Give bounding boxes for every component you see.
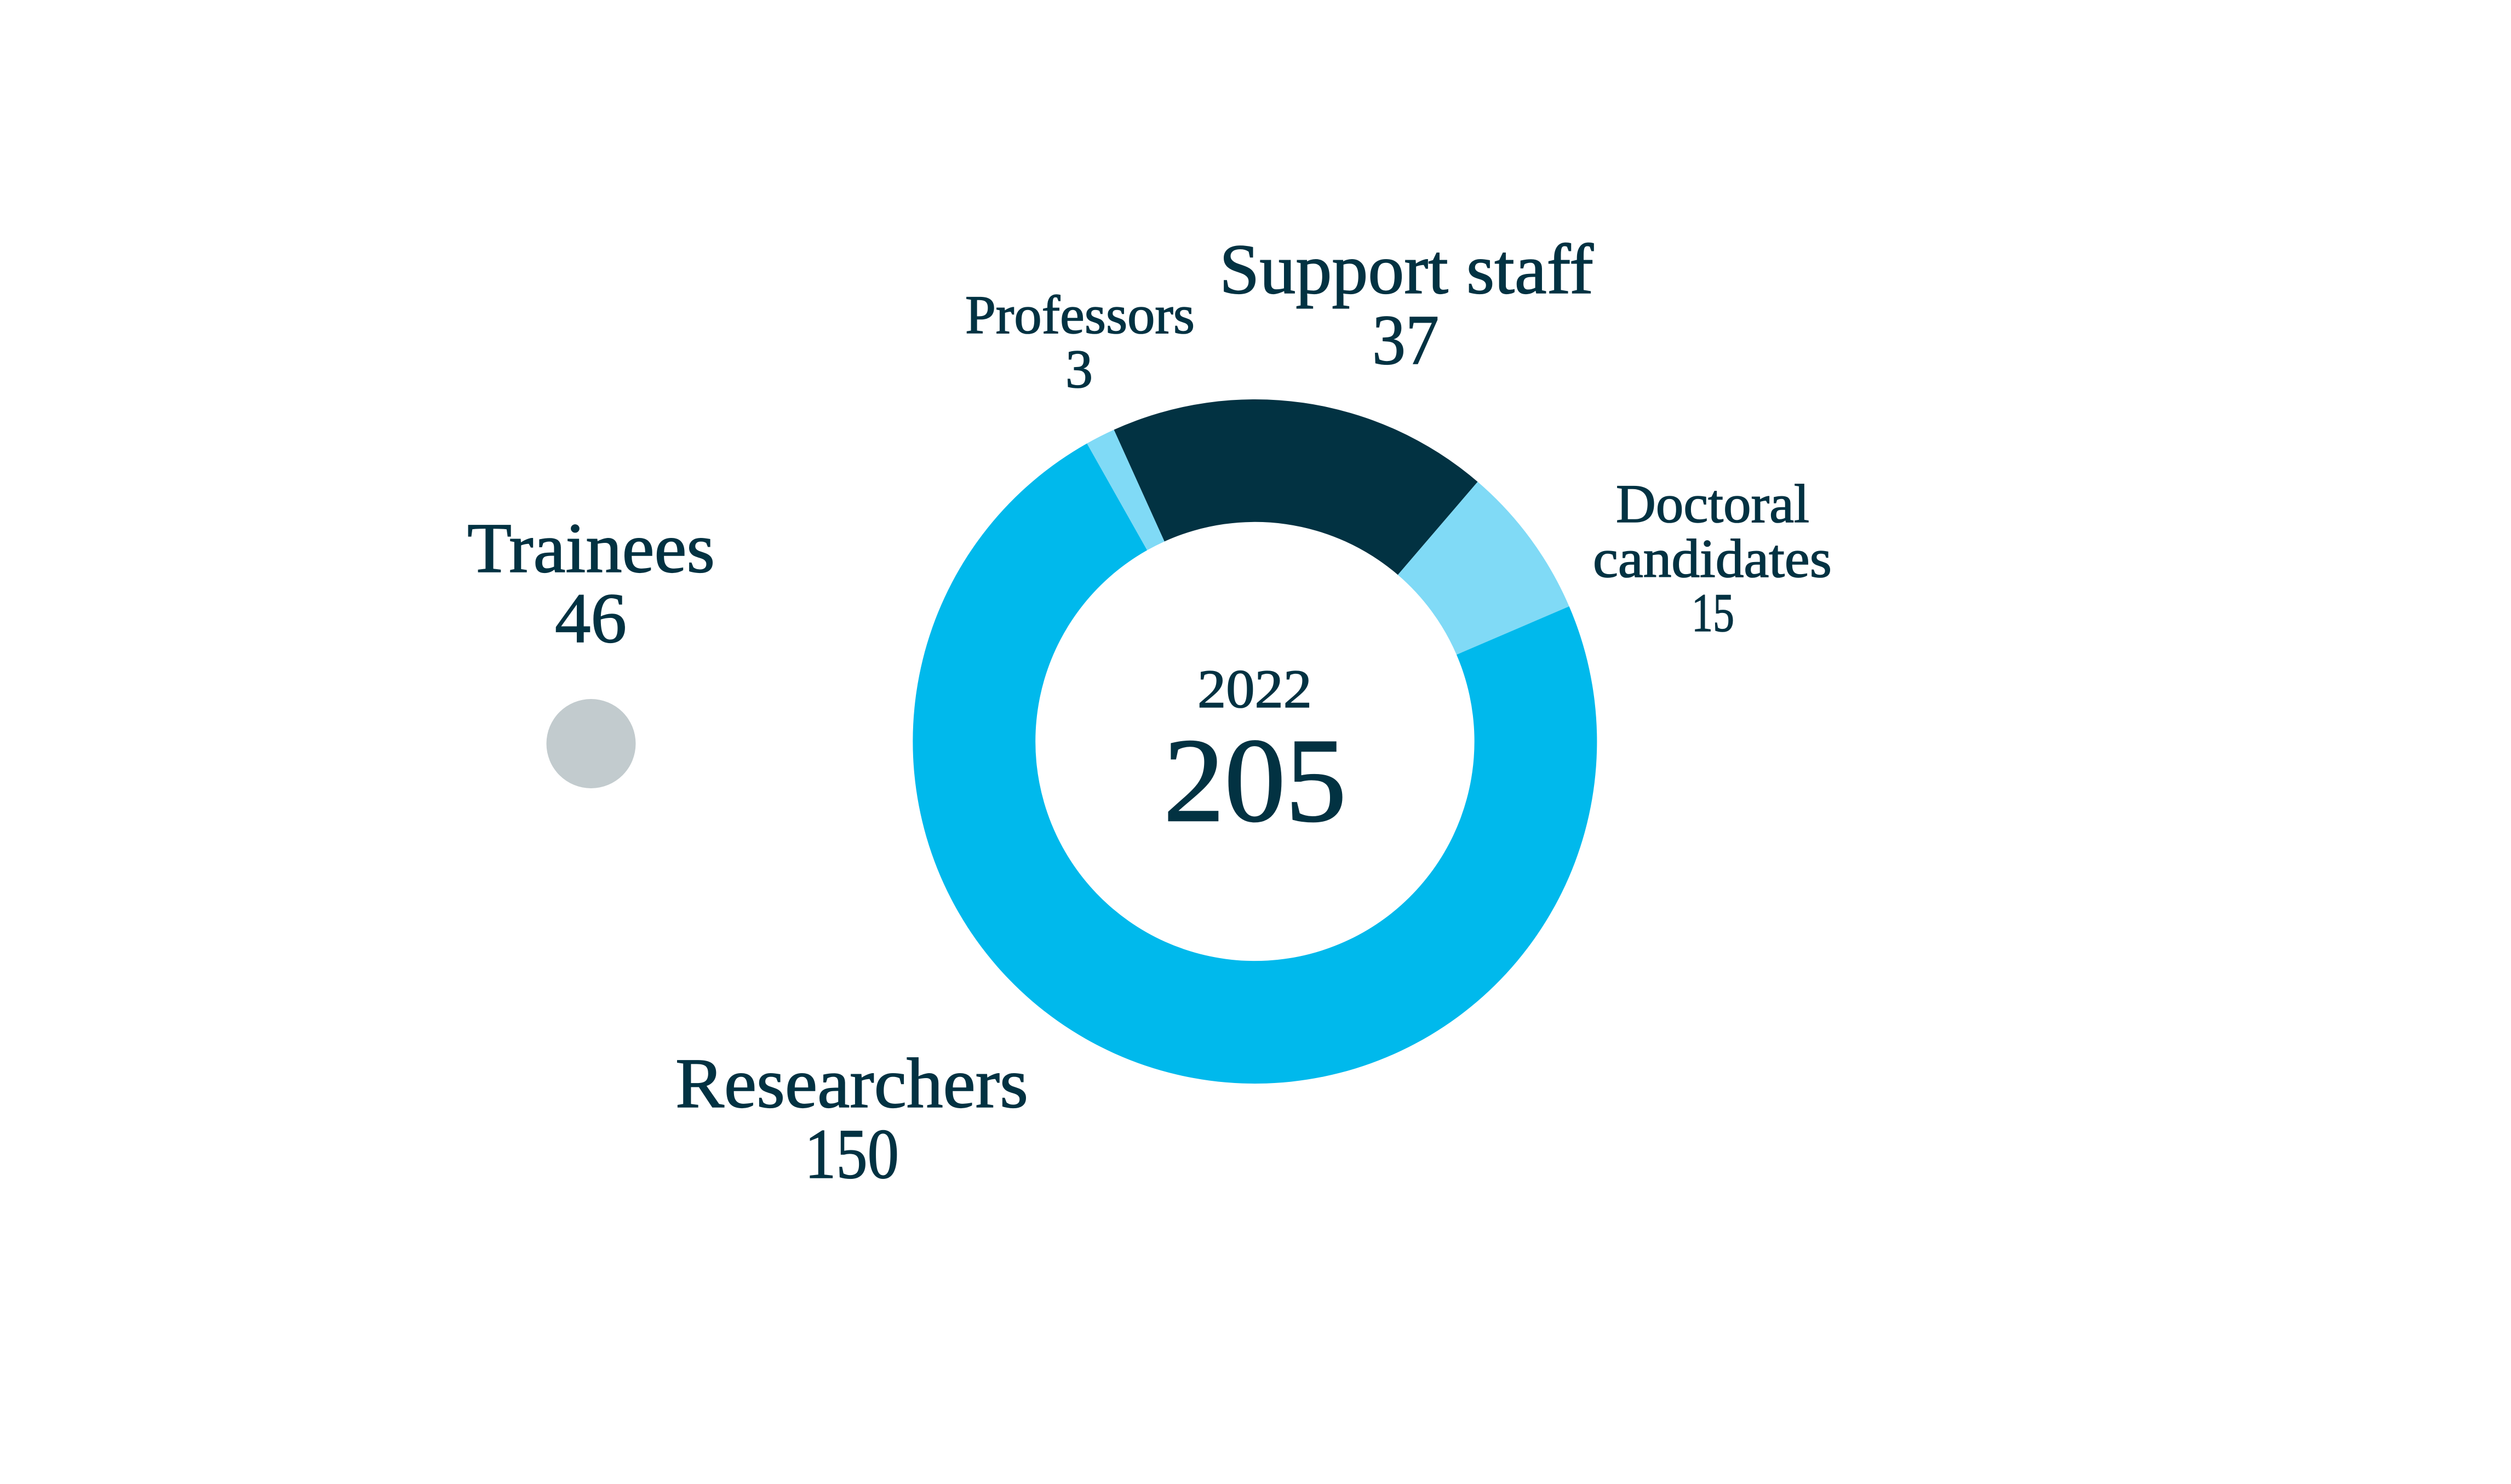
- segment: professors: [1087, 430, 1165, 550]
- donut chart: staff by category: [913, 399, 1597, 1084]
- label: doctoral candidates: 15: [1692, 582, 1734, 643]
- label: trainees: Trainees: [467, 509, 715, 588]
- label: doctoral candidates: Doctoral: [1616, 473, 1809, 534]
- trainees circle: [547, 699, 635, 788]
- label: researchers: [675, 1044, 1028, 1194]
- label: professors: Professors: [965, 284, 1195, 345]
- label: doctoral candidates: [1593, 473, 1832, 643]
- label: researchers: 150: [805, 1115, 899, 1194]
- year: 2022: [1197, 658, 1312, 719]
- label: trainees: [467, 509, 715, 658]
- label: support staff: Support staff: [1219, 230, 1594, 309]
- total: 205: [1163, 714, 1346, 847]
- label: support staff: 37: [1372, 301, 1439, 380]
- center total: 2022, 205: [1163, 658, 1346, 847]
- label: support staff: [1219, 230, 1594, 380]
- label: trainees: 46: [555, 579, 627, 658]
- segment: researchers: [913, 444, 1597, 1084]
- segment: support staff: [1114, 399, 1478, 575]
- label: researchers: Researchers: [675, 1044, 1028, 1123]
- label: professors: [965, 284, 1195, 399]
- label: professors: 3: [1065, 339, 1093, 399]
- segment: doctoral candidates: [1398, 482, 1569, 655]
- label: doctoral candidates: candidates: [1593, 528, 1832, 589]
